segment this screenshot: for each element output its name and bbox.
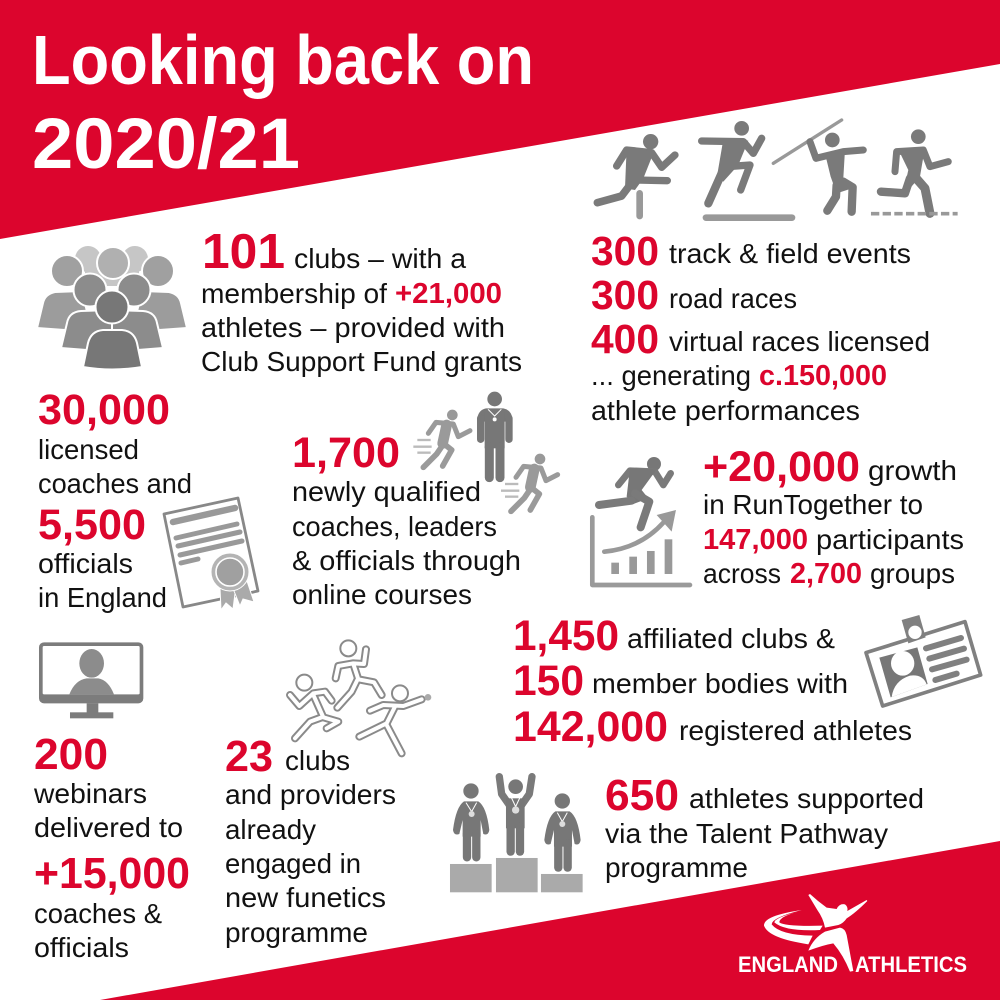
text: runtogether growth: participants (816, 524, 964, 555)
text: runtogether growth: across (703, 558, 781, 589)
top red banner (0, 0, 1000, 239)
text: events: c.150,000 (759, 360, 887, 392)
text: club support fund: membership of (201, 278, 387, 309)
icon: coach with two runners (413, 392, 558, 511)
text: affiliated clubs: 142,000 (513, 703, 668, 751)
text: runtogether growth (703, 443, 964, 590)
text: newly qualified coaches: 1,700 (292, 429, 400, 477)
text: events: athlete performances (591, 395, 860, 426)
icon: centre medallist (499, 777, 532, 852)
title (32, 21, 534, 184)
text: licensed coaches and officials: 5,500 (38, 501, 146, 549)
title: Looking back on (32, 21, 534, 99)
icon: hurdler (597, 134, 675, 216)
icon: monitor with presenter (39, 642, 143, 718)
text: club support fund: 101 (202, 225, 285, 279)
text: club support fund: athletes – provided with (201, 312, 505, 343)
icon: left medallist (453, 783, 489, 857)
text: club support fund: Club Support Fund grants (201, 346, 522, 377)
text: runtogether growth: +20,000 (703, 443, 860, 491)
text: talent pathway: via the Talent Pathway (605, 818, 888, 849)
logo: England Athletics: ENGLAND (738, 952, 838, 977)
text: talent pathway: 650 (605, 771, 679, 820)
text: events: track & field events (669, 238, 911, 269)
text: runtogether growth: in RunTogether to (703, 489, 923, 520)
text: club support fund: +21,000 (395, 278, 502, 310)
text: events: road races (669, 283, 797, 314)
text: events: virtual races licensed (669, 326, 930, 357)
text: webinars: coaches & (34, 898, 162, 929)
title: 2020/21 (32, 105, 300, 184)
text: talent pathway: athletes supported (689, 783, 924, 814)
text: webinars: delivered to (34, 812, 183, 843)
text: funetics: 23 (225, 732, 273, 781)
text: events (591, 228, 930, 426)
text: affiliated clubs: registered athletes (679, 715, 912, 746)
text: affiliated clubs: 150 (513, 657, 584, 705)
text: funetics (225, 732, 396, 948)
text: runtogether growth: groups (870, 558, 955, 589)
text: licensed coaches and officials: in England (38, 582, 167, 613)
text: runtogether growth: 147,000 (703, 524, 808, 556)
text: funetics: already (225, 814, 316, 845)
text: talent pathway (605, 771, 924, 883)
icon: podium with medallists (450, 777, 583, 892)
text: affiliated clubs (513, 612, 912, 751)
text: licensed coaches and officials: licensed (38, 434, 139, 465)
text: affiliated clubs: affiliated clubs & (627, 623, 835, 654)
text: club support fund: clubs – with a (294, 243, 466, 274)
text: affiliated clubs: 1,450 (513, 612, 619, 660)
text: events: 300 (591, 228, 659, 274)
logo: England Athletics (738, 894, 967, 977)
icon: long jumper (702, 121, 792, 218)
text: events: 300 (591, 272, 659, 318)
text: webinars: officials (34, 932, 129, 963)
bottom red banner (100, 841, 1000, 1000)
text: runtogether growth: 2,700 (790, 558, 862, 590)
text: webinars: +15,000 (34, 849, 190, 898)
icon: certificate (164, 498, 258, 610)
text: licensed coaches and officials: coaches and (38, 468, 192, 499)
text: webinars (33, 730, 190, 963)
icon: runner over growth chart (592, 457, 690, 585)
icon: right medallist (544, 793, 581, 868)
icon: group of people (37, 245, 187, 370)
text: newly qualified coaches: & officials through (292, 545, 521, 576)
text: webinars: webinars (33, 778, 147, 809)
text: club support fund (201, 225, 522, 377)
text: funetics: clubs (285, 745, 350, 776)
text: funetics: programme (225, 917, 368, 948)
text: talent pathway: programme (605, 852, 748, 883)
text: funetics: new funetics (225, 882, 386, 913)
logo: England Athletics: ATHLETICS (855, 952, 967, 977)
icon: ID card (866, 615, 981, 706)
text: newly qualified coaches: coaches, leaders (292, 511, 497, 542)
text: funetics: and providers (225, 779, 396, 810)
text: events: 400 (591, 316, 659, 362)
text: events: ... generating (591, 360, 751, 391)
text: licensed coaches and officials: officials (38, 548, 133, 579)
icon: javelin thrower (773, 120, 863, 212)
text: newly qualified coaches: online courses (292, 579, 472, 610)
text: newly qualified coaches (292, 429, 521, 610)
text: licensed coaches and officials (38, 386, 192, 613)
text: webinars: 200 (34, 730, 108, 779)
text: newly qualified coaches: newly qualified (292, 476, 481, 507)
text: licensed coaches and officials: 30,000 (38, 386, 170, 434)
text: affiliated clubs: member bodies with (592, 668, 848, 699)
icon: four athletes (597, 120, 958, 218)
text: runtogether growth: growth (868, 455, 957, 486)
text: funetics: engaged in (225, 848, 361, 879)
icon: runner on line (871, 129, 958, 214)
icon: three outlined runners (290, 640, 431, 753)
